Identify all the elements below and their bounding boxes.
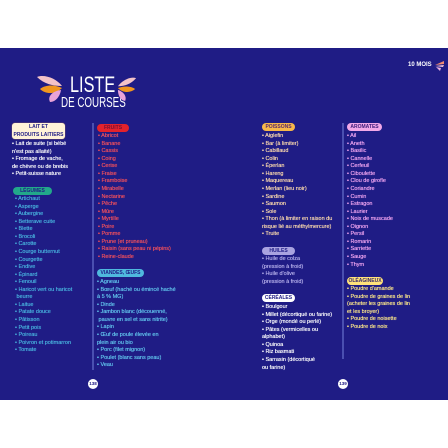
list: fruits: • Mûre xyxy=(98,209,114,215)
list: céréales: alphabet) xyxy=(262,334,285,340)
list: oléagineux: et les broyer) xyxy=(347,309,379,315)
list: légumes: • Blette xyxy=(15,226,33,232)
heading: oléagineux xyxy=(347,277,383,285)
list: légumes: • Carotte xyxy=(15,241,36,247)
list: légumes: • Endive xyxy=(15,264,35,270)
list: aromates xyxy=(346,132,393,268)
age label: 10 MOIS xyxy=(408,62,432,68)
list: légumes: • Épinard xyxy=(15,272,37,278)
list: viandes: à 5 % MG) xyxy=(97,294,123,300)
list: fruits: • Cerise xyxy=(98,163,117,169)
list: aromates: • Noix de muscade xyxy=(347,216,393,222)
list: poissons: • Saumon xyxy=(262,201,286,207)
heading: lait xyxy=(12,123,65,139)
list: aromates: • Aneth xyxy=(347,141,365,147)
list: fruits: • Mirabelle xyxy=(98,186,124,192)
list: fruits: • Prune (et pruneau) xyxy=(98,239,148,245)
list: aromates: • Sauge xyxy=(347,254,366,260)
list: lait: • Petit-suisse nature xyxy=(12,171,61,177)
list: huiles: • Huile d'olive xyxy=(262,271,295,277)
panel: légumes xyxy=(13,187,72,353)
list: légumes: • Pâtisson xyxy=(15,317,40,323)
list: aromates: • Sarriette xyxy=(347,246,371,252)
panel: poissons xyxy=(262,123,332,237)
list: légumes: • Asperge xyxy=(15,204,39,210)
list: viandes: • Œuf de poule élevée en xyxy=(97,332,159,338)
list: aromates: • Ciboulette xyxy=(347,171,375,177)
list: légumes: • Fenouil xyxy=(15,279,36,285)
list: huiles: • Huile de colza xyxy=(262,256,300,262)
list: poissons: • Sole xyxy=(262,209,276,215)
list: aromates: • Cannelle xyxy=(347,156,372,162)
list: poissons: • Truite xyxy=(262,231,279,237)
list: poissons xyxy=(262,132,332,237)
list: oléagineux xyxy=(346,286,410,330)
page number right xyxy=(338,379,348,389)
list: légumes: • Poivron et potimarron xyxy=(15,340,71,346)
heading: aromates xyxy=(347,123,382,131)
list: poissons: • Colin xyxy=(262,156,278,162)
list: poissons: • Merlan (lieu noir) xyxy=(262,186,307,192)
icon: small butterfly xyxy=(435,61,444,71)
icon: right butterfly wing xyxy=(118,78,136,101)
list: lait xyxy=(12,140,68,177)
list: aromates: • Romarin xyxy=(347,239,371,245)
list: aromates: • Ail xyxy=(347,133,356,139)
divider left xyxy=(92,123,94,370)
heading: viandes xyxy=(97,269,144,277)
list: fruits: • Nectarine xyxy=(98,194,125,200)
list: céréales: • Sarrasin (décortiqué xyxy=(262,357,315,363)
list: aromates: • Estragon xyxy=(347,201,372,207)
list: aromates: • Cumin xyxy=(347,194,366,200)
heading: poissons xyxy=(262,123,295,131)
list: viandes: • Dinde xyxy=(97,302,115,308)
list: céréales: • Quinoa xyxy=(262,342,283,348)
list: céréales: • Riz basmati xyxy=(262,349,294,355)
panel: lait et produits laitiers xyxy=(11,122,68,177)
list: légumes: • Courge butternut xyxy=(15,249,60,255)
list: céréales xyxy=(262,304,332,370)
page number left: 138 xyxy=(89,381,97,386)
list: huiles: (pression à froid) xyxy=(262,279,303,285)
list: fruits: • Pomme xyxy=(98,231,120,237)
list: poissons: • Sardine xyxy=(262,194,284,200)
list: viandes: • Veau xyxy=(97,362,113,368)
heading: LISTE: LISTE xyxy=(70,72,115,97)
list: poissons: • Bar (à limiter) xyxy=(262,141,298,147)
list: fruits: • Myrtille xyxy=(98,216,119,222)
list: viandes: • Porc (filet mignon) xyxy=(97,347,145,353)
list: viandes: • Bœuf (haché ou émincé haché xyxy=(97,287,176,293)
list: céréales: ou farine) xyxy=(262,364,285,370)
list: fruits: • Abricot xyxy=(98,133,118,139)
heading: fruits: FRUITS xyxy=(104,125,122,131)
list: viandes: • Agneau xyxy=(97,279,119,285)
list: légumes: • Courgette xyxy=(15,256,43,262)
list: fruits: • Poire xyxy=(98,224,114,230)
list: légumes: • Artichaut xyxy=(15,196,40,202)
icon: left butterfly wing xyxy=(37,76,62,102)
list: légumes xyxy=(15,196,72,353)
navy background panel xyxy=(0,48,448,400)
list: viandes: • Lapin xyxy=(97,324,114,330)
list: aromates: • Clou de girofle xyxy=(347,178,386,184)
page number left xyxy=(88,379,98,389)
list: fruits: • Coing xyxy=(98,156,116,162)
panel: fruits xyxy=(97,124,171,260)
list: fruits: • Framboise xyxy=(98,178,127,184)
heading: fruits xyxy=(97,124,129,132)
list: lait: • Lait de suite (si bébé xyxy=(12,141,66,147)
panel: céréales xyxy=(262,294,332,370)
subheading: DE COURSES: DE COURSES xyxy=(61,95,126,111)
list: lait: n'est pas allaité) xyxy=(12,149,52,155)
list: fruits: • Cassis xyxy=(98,148,118,154)
list: fruits: • Fraise xyxy=(98,171,117,177)
heading: oléagineux: OLÉAGINEUX xyxy=(348,278,382,284)
heading: légumes: LÉGUMES xyxy=(20,188,45,194)
list: lait: • Fromage de vache, xyxy=(12,156,63,162)
list: oléagineux: (acheter les graines de lin xyxy=(347,301,410,307)
list: légumes: • Tomate xyxy=(15,347,36,353)
list: aromates: • Oignon xyxy=(347,224,368,230)
list: légumes: • Brocoli xyxy=(15,234,35,240)
list: oléagineux: • Poudre de noix xyxy=(347,324,387,330)
list: huiles xyxy=(262,256,304,285)
heading: légumes xyxy=(13,187,52,195)
list: oléagineux: • Poudre de graines de lin xyxy=(347,294,410,300)
list: céréales: • Orge (mondé ou perlé) xyxy=(262,319,321,325)
heading: céréales xyxy=(262,294,295,302)
panel: huiles xyxy=(262,247,304,285)
list: poissons: • Thon (à limiter en raison du xyxy=(262,216,332,222)
list: poissons: • Maquereau xyxy=(262,178,293,184)
heading: huiles: HUILES xyxy=(269,248,288,254)
heading: lait: PRODUITS LAITIERS xyxy=(13,132,64,138)
list: poissons: • Hareng xyxy=(262,171,284,177)
list: légumes: • Laitue xyxy=(15,302,33,308)
heading: lait: LAIT ET xyxy=(29,124,48,130)
list: fruits: • Banane xyxy=(98,141,120,147)
list: légumes: • Petit pois xyxy=(15,325,41,331)
list: légumes: • Poireau xyxy=(15,332,37,338)
list: fruits: • Pêche xyxy=(98,201,117,207)
list: légumes: • Patate douce xyxy=(15,309,51,315)
heading: poissons: POISSONS xyxy=(265,124,292,130)
list: viandes: pauvre en sel et sans nitrite) xyxy=(99,317,168,323)
list: oléagineux: • Poudre de noisette xyxy=(347,316,397,322)
list: poissons: • Cabillaud xyxy=(262,148,288,154)
list: légumes: • Aubergine xyxy=(15,211,43,217)
list: aromates: • Cerfeuil xyxy=(347,163,369,169)
list: poissons: • Aiglefin xyxy=(262,133,283,139)
list: viandes: • Jambon blanc (découenné, xyxy=(97,309,167,315)
list: viandes xyxy=(97,278,176,368)
divider right xyxy=(342,123,344,359)
list: céréales: • Pâtes (vermicelles ou xyxy=(262,327,318,333)
heading: aromates: AROMATES xyxy=(350,124,379,130)
list: viandes: • Poulet (blanc sans peau) xyxy=(97,355,161,361)
list: fruits: • Reine-claude xyxy=(98,254,134,260)
header tag: 10 mois xyxy=(408,61,444,71)
title: liste de courses xyxy=(37,72,136,111)
panel: oléagineux xyxy=(346,277,410,330)
list: légumes: beurre xyxy=(17,294,32,300)
page number right: 139 xyxy=(339,381,347,386)
heading: huiles xyxy=(262,247,295,255)
list: aromates: • Coriandre xyxy=(347,186,375,192)
list: légumes: • Haricot vert ou haricot xyxy=(15,287,72,293)
list: aromates: • Thym xyxy=(347,262,364,268)
list: viandes: plein air ou bio xyxy=(97,340,133,346)
list: lait: de chèvre ou de brebis xyxy=(12,164,68,170)
list: poissons: risque lié au méthylmercure) xyxy=(262,224,331,230)
list: fruits xyxy=(98,132,171,260)
list: fruits: • Raisin (sans peau ni pépins) xyxy=(98,246,171,252)
heading: céréales: CÉRÉALES xyxy=(265,295,292,301)
panel: viandes, œufs xyxy=(97,269,176,368)
list: aromates: • Persil xyxy=(347,231,364,237)
panel: aromates xyxy=(346,123,393,268)
list: aromates: • Laurier xyxy=(347,209,368,215)
list: poissons: • Éperlan xyxy=(262,163,284,169)
list: céréales: • Boulgour xyxy=(262,304,287,310)
list: oléagineux: • Poudre d'amande xyxy=(347,286,394,292)
list: légumes: • Betterave cuite xyxy=(15,219,55,225)
list: huiles: (pression à froid) xyxy=(262,264,303,270)
list: céréales: • Millet (décortiqué ou farine) xyxy=(262,312,332,318)
heading: viandes: VIANDES, ŒUFS xyxy=(100,270,140,276)
list: aromates: • Basilic xyxy=(347,148,366,154)
